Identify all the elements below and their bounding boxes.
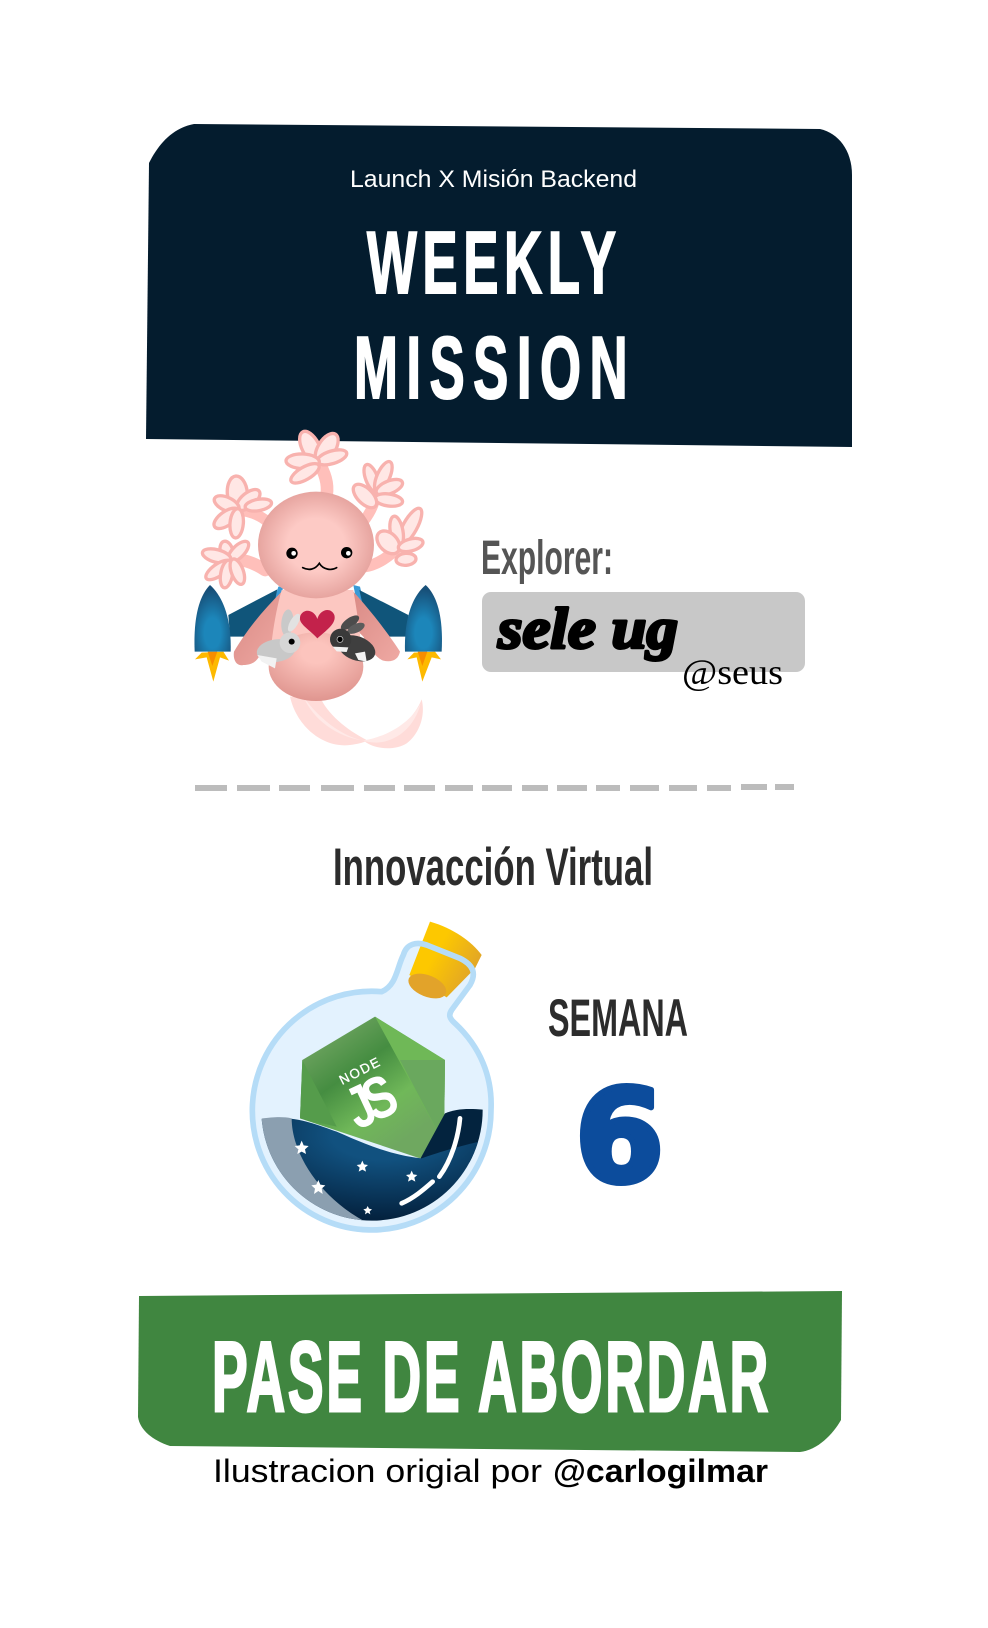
icon: grey rabbit	[255, 609, 302, 668]
bottle glass	[252, 943, 491, 1230]
icon: dark rabbit	[330, 613, 379, 666]
head	[258, 492, 374, 598]
liquid	[262, 1109, 483, 1221]
wings	[228, 585, 408, 637]
icon: left rocket	[194, 585, 231, 682]
arms	[234, 592, 400, 665]
week label: SEMANA	[548, 989, 688, 1048]
js label: JS	[335, 1062, 408, 1142]
panel: header	[146, 124, 852, 447]
gills: top	[286, 428, 349, 495]
tail	[290, 697, 423, 748]
panel: boarding pass banner	[138, 1291, 842, 1452]
heading: mission: MISSION	[354, 319, 628, 417]
credit line: Ilustracion origial por	[213, 1453, 542, 1489]
banner text: PASE DE ABORDAR	[212, 1321, 768, 1432]
icon: heart	[300, 610, 335, 638]
explorer name: sele ug	[497, 596, 678, 661]
highlight arc	[402, 1118, 460, 1203]
illustration: axolotl with rockets	[194, 428, 442, 748]
icon: right rocket	[405, 585, 442, 682]
heading: innovaccion virtual: Innovacción Virtual	[333, 838, 653, 897]
gills: lower right	[365, 505, 426, 567]
icon: node.js hexagon	[300, 1017, 445, 1158]
dashed divider	[195, 784, 794, 791]
label: explorer: Explorer:	[481, 532, 613, 585]
explorer handle: @seus	[682, 652, 783, 692]
gills: lower left	[201, 538, 265, 589]
stars	[295, 1141, 417, 1214]
body	[269, 590, 363, 701]
week number: 6	[575, 1063, 664, 1212]
gills: upper right	[349, 459, 405, 522]
bottle outline	[252, 943, 491, 1230]
gills: upper left	[211, 475, 272, 539]
heading: weekly: WEEKLY	[367, 214, 616, 312]
subtitle: Launch X Misión Backend	[350, 166, 637, 193]
node label: NODE	[337, 1055, 382, 1088]
name box	[482, 592, 805, 672]
credit line	[213, 1453, 768, 1489]
credit line: @carlogilmar	[553, 1453, 768, 1489]
icon: cork	[405, 922, 482, 1003]
illustration: node.js bottle	[252, 922, 491, 1230]
